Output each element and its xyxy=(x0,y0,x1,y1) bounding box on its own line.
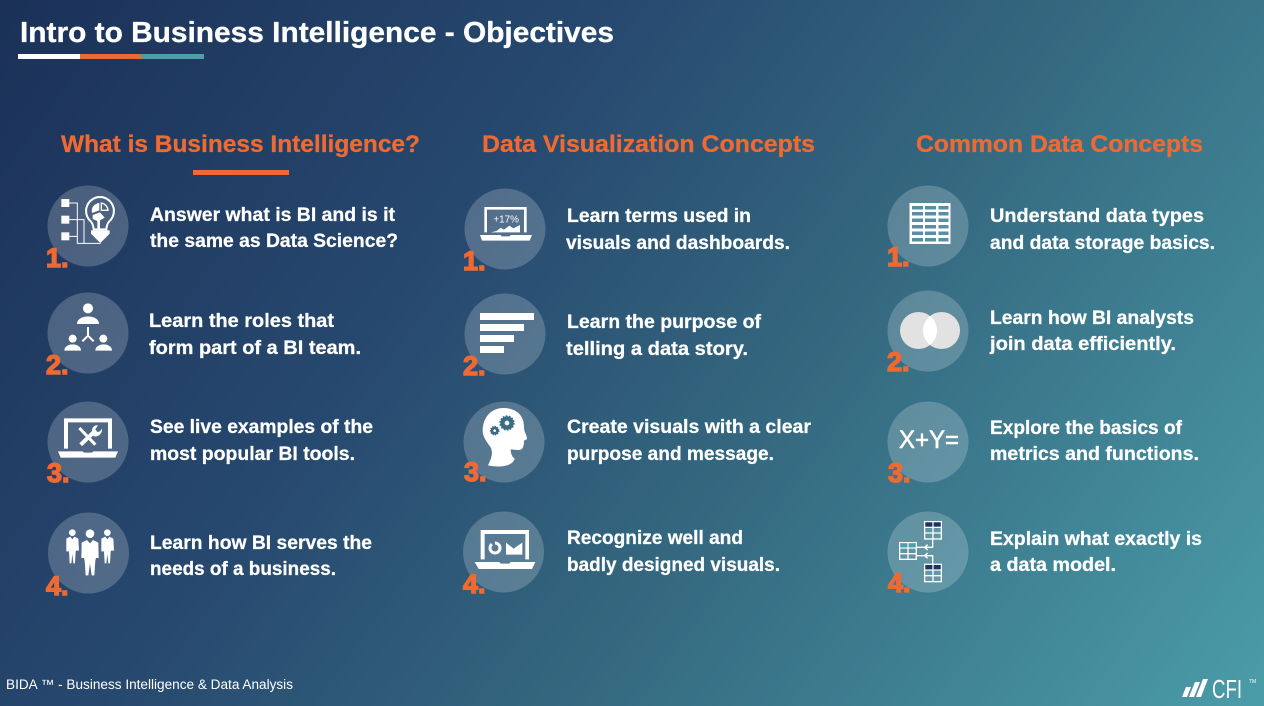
number 3: 3. xyxy=(464,457,487,487)
heading underline xyxy=(193,170,289,175)
item 2: joins xyxy=(887,290,1194,377)
number 1: 1. xyxy=(887,242,910,272)
heading: Data Visualization Concepts: Data Visualization Concepts xyxy=(482,131,815,158)
item text: a data model. xyxy=(990,554,1116,576)
item 4: data model xyxy=(888,512,1202,598)
item text xyxy=(990,417,1199,465)
item 2: data story xyxy=(463,294,762,381)
icon: laptop with tools xyxy=(58,418,118,458)
panel: What is Business Intelligence xyxy=(46,131,420,601)
item text xyxy=(150,532,372,580)
icon: linked tables xyxy=(900,522,941,582)
item text: form part of a BI team. xyxy=(149,337,361,359)
number 1: 1. xyxy=(46,243,69,273)
item text: needs of a business. xyxy=(150,558,336,580)
footer text: BIDA ™ - Business Intelligence & Data Analysis xyxy=(6,677,293,692)
item text xyxy=(989,307,1194,355)
item text: Explain what exactly is xyxy=(990,528,1202,550)
icon: org chart and light bulb xyxy=(61,197,114,243)
heading: Common Data Concepts: Common Data Concepts xyxy=(916,131,1203,158)
title underline xyxy=(18,54,204,59)
number 2: 2. xyxy=(887,347,910,377)
item text: and data storage basics. xyxy=(990,232,1215,254)
number 2: 2. xyxy=(46,350,69,380)
heading: What is Business Intelligence: What is Business Intelligence? xyxy=(61,131,420,158)
item text xyxy=(990,528,1202,576)
item text: purpose and message. xyxy=(567,443,774,465)
item text: Learn terms used in xyxy=(567,205,751,227)
title: Intro to Business Intelligence - Objectives xyxy=(20,17,614,49)
panel: Data Visualization Concepts xyxy=(463,131,815,599)
logo: CFI xyxy=(1182,674,1256,704)
item text xyxy=(566,205,790,254)
item text xyxy=(567,416,811,465)
icon: team hierarchy xyxy=(64,303,112,351)
item text: badly designed visuals. xyxy=(567,554,780,576)
item text: Learn how BI serves the xyxy=(150,532,372,554)
icon: venn diagram xyxy=(900,312,960,349)
number 4: 4. xyxy=(888,568,911,598)
number 4: 4. xyxy=(463,569,486,599)
icon: head with gears xyxy=(483,408,527,466)
item text: the same as Data Science? xyxy=(150,230,398,252)
number 3: 3. xyxy=(47,458,70,488)
icon: laptop with chart symbols xyxy=(475,530,535,569)
item text: Learn the roles that xyxy=(149,310,335,332)
panel: Common Data Concepts xyxy=(887,131,1215,598)
item text: Learn the purpose of xyxy=(567,311,762,333)
item text xyxy=(566,311,762,360)
item text xyxy=(150,416,373,465)
item text: Explore the basics of xyxy=(990,417,1182,439)
item text: Learn how BI analysts xyxy=(990,307,1194,329)
item text: join data efficiently. xyxy=(989,333,1176,355)
number 4: 4. xyxy=(46,571,69,601)
item text xyxy=(150,204,398,252)
item 1: terms xyxy=(463,188,790,276)
item text: Create visuals with a clear xyxy=(567,416,811,438)
item 1: what is BI xyxy=(46,186,398,273)
item 3: BI tools xyxy=(47,402,373,488)
icon: data table xyxy=(910,203,950,244)
item 3: metrics and functions xyxy=(888,402,1199,488)
item text: Answer what is BI and is it xyxy=(150,204,396,226)
item 4: well and badly designed xyxy=(463,512,780,599)
item 4: business needs xyxy=(46,512,372,601)
item 2: BI team roles xyxy=(46,292,361,380)
icon: horizontal bars xyxy=(480,313,534,353)
logo: CFI: TM xyxy=(1249,679,1256,685)
number 3: 3. xyxy=(888,458,911,488)
item text: Understand data types xyxy=(990,205,1204,227)
icon: X+Y= formula: X+Y= xyxy=(899,426,959,454)
item text: See live examples of the xyxy=(150,416,373,438)
item text: visuals and dashboards. xyxy=(566,232,790,254)
item text: metrics and functions. xyxy=(990,443,1199,465)
item text: Recognize well and xyxy=(567,527,743,549)
item text xyxy=(567,527,780,576)
logo: CFI: CFI xyxy=(1212,674,1242,704)
number 1: 1. xyxy=(463,246,486,276)
item 3: clear purpose xyxy=(464,402,811,487)
item text: most popular BI tools. xyxy=(150,443,355,465)
item 1: data types xyxy=(887,186,1215,272)
item text xyxy=(990,205,1215,254)
icon: laptop with percentage: +17% xyxy=(493,215,519,226)
item text xyxy=(149,310,361,359)
item text: telling a data story. xyxy=(566,338,748,360)
icon: laptop with percentage xyxy=(480,207,532,241)
icon: three business people xyxy=(66,529,114,575)
number 2: 2. xyxy=(463,351,486,381)
